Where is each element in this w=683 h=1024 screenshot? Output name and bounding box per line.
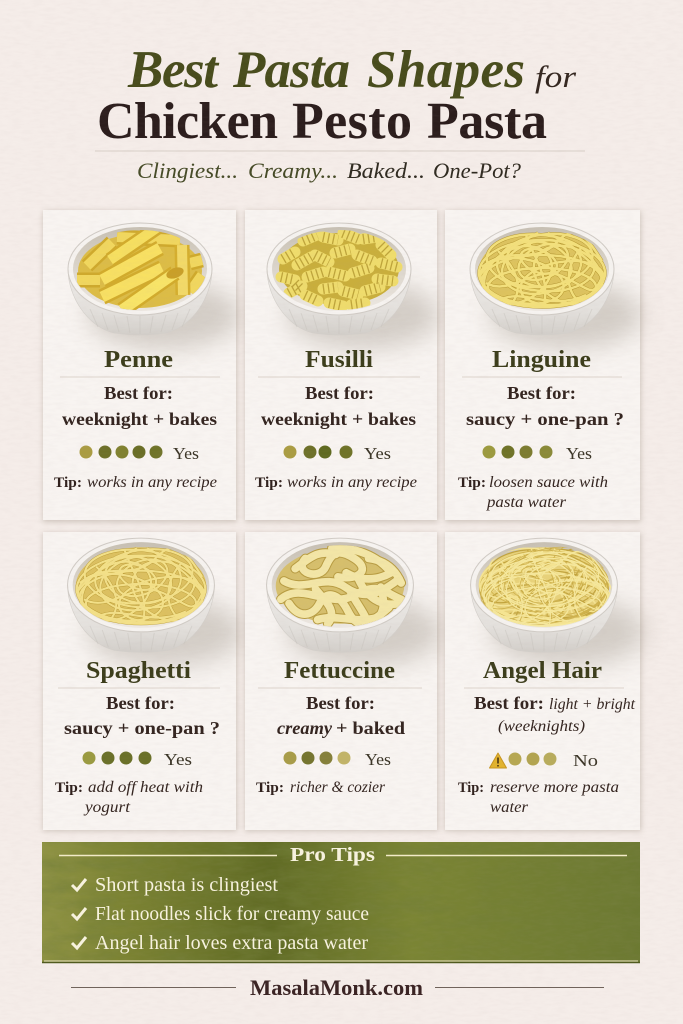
tip: yogurt: [83, 799, 131, 816]
rating: clinginess: [482, 444, 592, 463]
best for: [466, 383, 624, 429]
title: Pesto: [292, 93, 412, 150]
best for: Best for:: [507, 383, 576, 403]
panel: angel hair: [445, 532, 646, 830]
subtitle: One-Pot?: [433, 158, 521, 183]
rating: clinginess: [80, 444, 199, 463]
subtitle: Baked...: [347, 158, 425, 183]
best for: [62, 383, 217, 429]
icon: bowl of fusilli: [267, 223, 439, 349]
best for: [277, 693, 405, 738]
tip: [55, 779, 203, 816]
rating: clinginess: Yes: [365, 750, 391, 769]
best for: Best for:: [306, 693, 375, 713]
name: Penne: [104, 347, 173, 373]
rating: clinginess: [284, 444, 391, 463]
tip: works in any recipe: [287, 474, 417, 491]
tip: pasta water: [486, 494, 567, 511]
panel: pro tips: [42, 842, 640, 963]
best for: [474, 693, 636, 735]
best for: [261, 383, 416, 429]
panel: fettuccine: [245, 532, 442, 830]
rating: clinginess: Yes: [566, 444, 592, 463]
title: Pasta: [232, 41, 350, 99]
title: Shapes: [367, 41, 525, 99]
tip: add off heat with: [88, 779, 203, 796]
tip: richer & cozier: [290, 779, 386, 796]
tip: [458, 779, 619, 816]
panel: penne: [43, 210, 240, 520]
footer: website: MasalaMonk.com: [250, 975, 423, 1000]
best for: creamy: [277, 718, 333, 738]
card shadows: [43, 211, 641, 831]
title: Best: [127, 41, 220, 99]
subtitle: Clingiest...: [137, 158, 238, 183]
icon: warning triangle: [490, 753, 506, 768]
panel: linguine: [445, 210, 642, 520]
best for: + baked: [336, 718, 405, 738]
best for: Best for:: [106, 693, 175, 713]
best for: saucy + one-pan ?: [466, 409, 624, 429]
icon: bowl of angel hair: [469, 534, 646, 667]
title: [97, 41, 577, 150]
rating: clinginess: Yes: [364, 444, 391, 463]
tip list: Flat noodles slick for creamy sauce: [95, 903, 369, 925]
tip: works in any recipe: [87, 474, 217, 491]
name: Fusilli: [305, 347, 373, 373]
name: Spaghetti: [86, 658, 191, 684]
best for: saucy + one-pan ?: [64, 718, 220, 738]
panel: spaghetti: [43, 532, 243, 830]
name: Fettuccine: [284, 658, 395, 684]
title: Chicken: [97, 93, 278, 150]
best for: Best for:: [305, 383, 374, 403]
rating: clinginess: Yes: [173, 444, 199, 463]
panel: fusilli: [245, 210, 439, 520]
best for: Best for:: [104, 383, 173, 403]
tip: Tip:: [55, 780, 83, 796]
tip: reserve more pasta: [490, 779, 619, 796]
icon: bowl of spaghetti: [68, 538, 243, 667]
icon: bowl of fettuccine: [267, 538, 442, 667]
rating: clinginess: [284, 750, 391, 769]
best for: [64, 693, 220, 738]
best for: (weeknights): [498, 718, 585, 735]
tip: Tip:: [458, 475, 486, 491]
best for: weeknight + bakes: [261, 409, 416, 429]
icon: bowl of penne: [68, 223, 240, 349]
subtitle: [137, 158, 521, 183]
rating: clinginess with warning: No: [573, 751, 598, 770]
tip: Tip:: [458, 780, 484, 796]
tip list: Angel hair loves extra pasta water: [95, 932, 368, 954]
tip: [458, 474, 608, 511]
tip list: [72, 874, 369, 954]
heading: Pro Tips: [290, 844, 375, 866]
best for: weeknight + bakes: [62, 409, 217, 429]
tip: Tip:: [255, 475, 283, 491]
tip: Tip:: [54, 475, 82, 491]
subtitle: Creamy...: [248, 158, 338, 183]
tip list: Short pasta is clingiest: [95, 874, 278, 896]
rating: clinginess: [82, 750, 192, 769]
rating: clinginess: Yes: [164, 750, 192, 769]
tip: loosen sauce with: [489, 474, 608, 491]
name: Angel Hair: [483, 658, 602, 684]
tip: Tip:: [256, 780, 284, 796]
icon: bowl of linguine: [470, 223, 642, 349]
title: Pasta: [427, 93, 547, 150]
title: for: [535, 59, 577, 94]
rating: clinginess with warning: [490, 751, 598, 770]
tip: water: [490, 799, 529, 816]
best for: Best for:: [474, 693, 544, 713]
best for: light + bright: [549, 696, 636, 713]
name: Linguine: [492, 347, 591, 373]
